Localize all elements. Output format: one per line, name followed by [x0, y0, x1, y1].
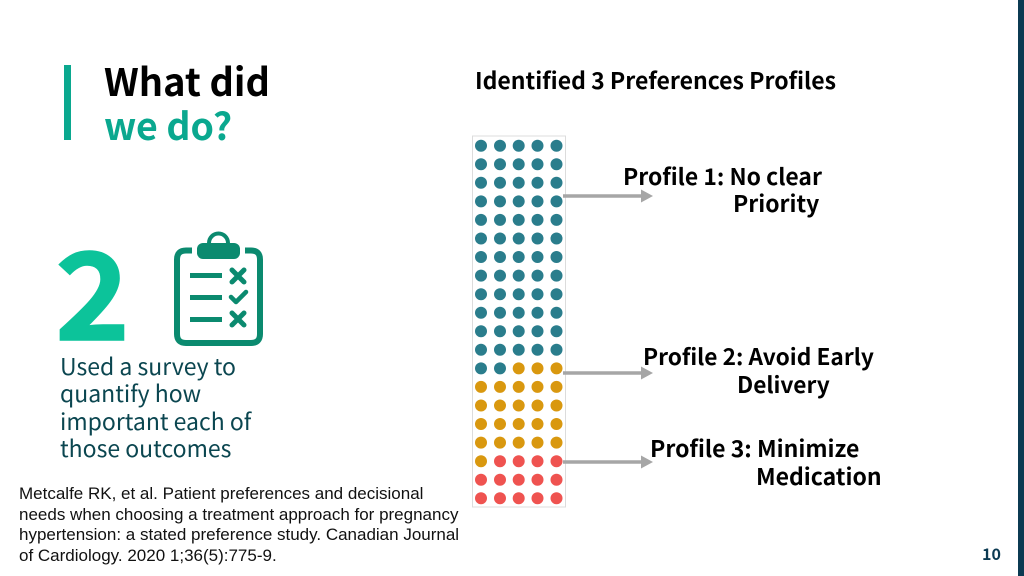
survey description: quantify how [60, 375, 201, 409]
label: profile 2: Profile 2: Avoid Early [643, 339, 874, 372]
dot chart [472, 136, 566, 508]
citation: needs when choosing a treatment approach for pregnancy [19, 504, 458, 524]
survey description: important each of [60, 403, 251, 437]
title accent bar [64, 65, 71, 140]
page number: 10 [982, 541, 1001, 565]
citation: of Cardiology. 2020 1;36(5):775-9. [19, 546, 277, 564]
label: profile 2 [643, 339, 874, 400]
label: profile 2: Delivery [737, 366, 830, 400]
label: profile 3 [650, 430, 882, 492]
label: profile 1: Profile 1: No clear [623, 158, 822, 192]
citation [19, 484, 459, 564]
title [104, 52, 270, 151]
arrow: profile 3 [563, 456, 653, 468]
survey description: those outcomes [60, 430, 231, 464]
label: profile 1 [623, 158, 822, 219]
survey description: Used a survey to [60, 348, 236, 382]
yellow dots [475, 362, 562, 467]
title: we do? [104, 96, 232, 151]
teal dots [475, 140, 562, 374]
step number: 2 [55, 200, 130, 375]
citation: Metcalfe RK, et al. Patient preferences and decisional [19, 484, 423, 503]
arrow: profile 2 [563, 366, 653, 380]
chart heading: Identified 3 Preferences Profiles [475, 62, 836, 96]
right edge bar [1018, 0, 1024, 576]
red dots [475, 455, 562, 504]
label: profile 1: Priority [733, 185, 819, 219]
citation: hypertension: a stated preference study. Canadian Journal [19, 525, 459, 544]
arrow: profile 1 [563, 190, 653, 202]
label: profile 3: Medication [756, 458, 882, 492]
icon: clipboard checklist [174, 232, 263, 346]
label: profile 3: Profile 3: Minimize [650, 430, 859, 464]
survey description [60, 348, 252, 464]
title: What did [104, 52, 270, 107]
